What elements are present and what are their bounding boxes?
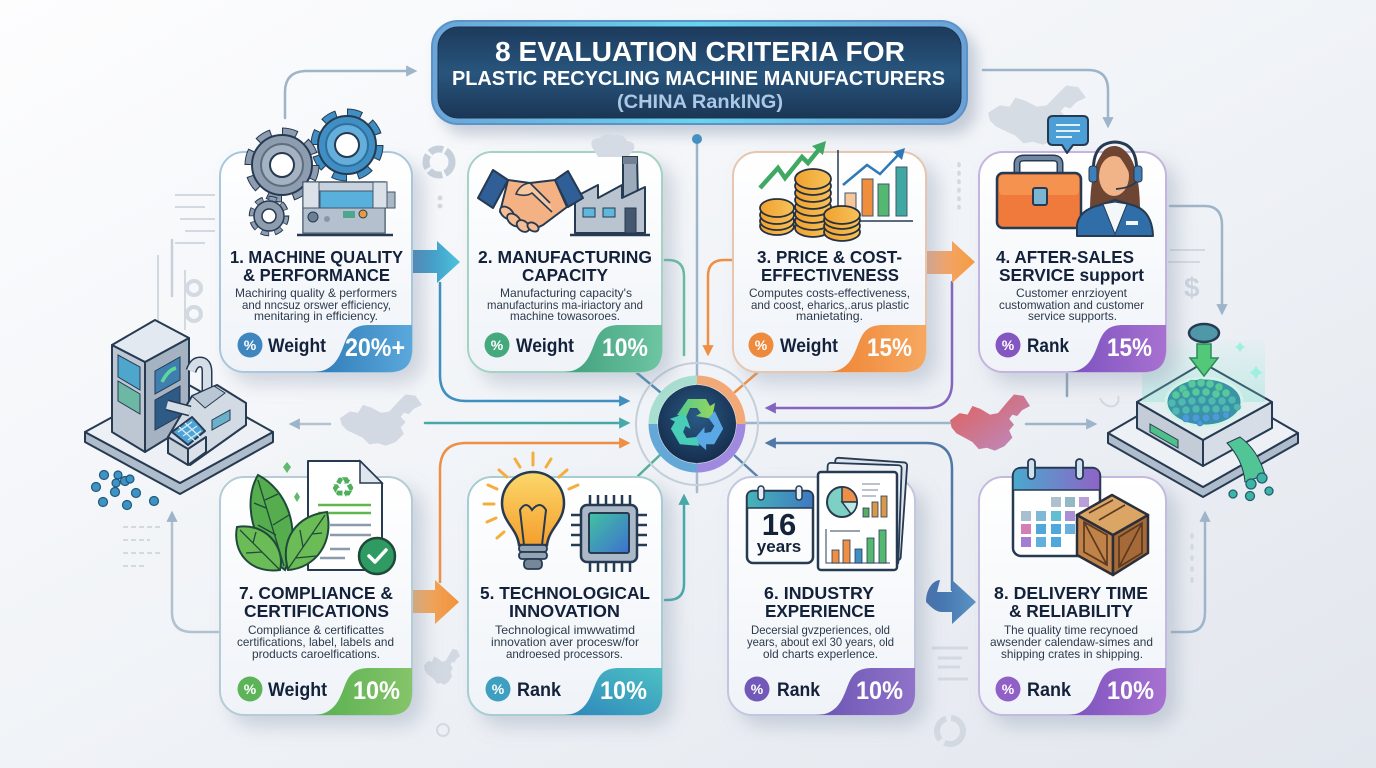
badge: % xyxy=(492,681,505,697)
icon: calendar and reports xyxy=(747,458,907,570)
badge xyxy=(238,676,262,702)
big arrow: card 6 to card 8 xyxy=(926,580,976,624)
description: shipping crates in shipping. xyxy=(1001,647,1143,661)
card xyxy=(468,152,662,372)
illustration: right pelletizing machine xyxy=(1108,324,1298,500)
value tab xyxy=(1067,325,1166,372)
connector: card 2 to hub xyxy=(665,260,684,355)
panel: criterion 5 xyxy=(468,453,662,715)
arrow: card 5 to hub xyxy=(665,497,684,600)
description xyxy=(491,623,639,661)
heading: 4. AFTER-SALES xyxy=(996,247,1134,267)
badge: % xyxy=(1002,337,1015,353)
description: old charts experlence. xyxy=(763,647,878,661)
arrow: map to hub xyxy=(425,422,627,424)
description: Technological imwwatimd xyxy=(495,623,635,637)
value: 10% xyxy=(1107,677,1154,705)
heading: EFFECTIVENESS xyxy=(761,265,899,285)
description: customwation and customer xyxy=(999,298,1144,312)
description: Customer enrzioyent xyxy=(1016,286,1128,300)
panel: criterion 2 xyxy=(468,134,662,372)
description xyxy=(999,286,1144,323)
description: The quality time recynoed xyxy=(1004,623,1138,637)
value: 10% xyxy=(600,677,647,705)
description xyxy=(749,286,910,323)
icon: briefcase and support agent xyxy=(997,116,1153,236)
big arrow: card 7 to card 5 xyxy=(412,580,459,624)
description: Machiring quality & performers xyxy=(235,286,397,300)
illustration: left recycling machine xyxy=(85,320,273,494)
card xyxy=(733,152,926,372)
arrow: left machine outlet xyxy=(172,514,218,632)
heading: & RELIABILITY xyxy=(1009,601,1133,621)
value: 10% xyxy=(856,677,903,705)
icon: calendar and crate xyxy=(1013,459,1148,575)
description: products caroelfications. xyxy=(252,647,380,661)
arrow: right machine outlet xyxy=(1172,514,1205,632)
label: Weight xyxy=(268,336,327,357)
icon: gears and machine xyxy=(249,113,395,235)
icon: calendar and reports: years xyxy=(757,537,801,556)
badge xyxy=(996,332,1020,358)
description: and nncsuz orswer efficiency, xyxy=(242,298,391,312)
line: title to hub xyxy=(696,140,698,390)
arrow: card 4 to hub xyxy=(768,282,952,408)
panel: criterion 1 xyxy=(220,113,412,372)
heading xyxy=(764,583,875,621)
heading: 6. INDUSTRY xyxy=(764,583,874,603)
value tab xyxy=(827,325,926,372)
badge xyxy=(748,332,774,358)
background: decorative lines and dollar sign xyxy=(123,149,1205,744)
heading: CERTIFICATIONS xyxy=(244,601,389,621)
icon: handshake and factory xyxy=(478,134,650,235)
description xyxy=(237,623,394,661)
icon: calendar and reports: 16 xyxy=(762,507,796,542)
diagonal spokes xyxy=(637,373,660,392)
label: Weight xyxy=(268,680,328,701)
value tab xyxy=(563,325,662,372)
icon: coins and growth chart xyxy=(760,141,913,241)
panel: criterion 3 xyxy=(733,141,926,372)
card xyxy=(979,477,1166,715)
central recycling hub xyxy=(636,363,758,485)
badge: % xyxy=(491,337,504,353)
heading: 5. TECHNOLOGICAL xyxy=(480,583,650,603)
heading: 8. DELIVERY TIME xyxy=(994,583,1148,603)
big arrow: card 3 to card 4 xyxy=(926,241,975,283)
heading: 3. PRICE & COST- xyxy=(757,247,902,267)
description: machine towasoroes. xyxy=(510,309,620,323)
background: decorative lines and dollar sign: $ xyxy=(1184,272,1200,303)
heading: 2. MANUFACTURING xyxy=(478,247,652,267)
badge: % xyxy=(751,681,764,697)
title dot xyxy=(692,134,702,144)
heading xyxy=(757,247,902,285)
description: service supports. xyxy=(1028,309,1117,323)
arrow: title right feed xyxy=(983,70,1108,125)
heading: 1. MACHINE QUALITY xyxy=(230,247,403,267)
description xyxy=(990,623,1153,661)
value tab xyxy=(816,668,915,715)
description: years, about exl 30 years, old xyxy=(747,635,894,649)
arrow: card 8 to hub xyxy=(768,443,952,590)
title banner: 8 EVALUATION CRITERIA FOR xyxy=(495,36,905,67)
title banner: PLASTIC RECYCLING MACHINE MANUFACTURERS xyxy=(452,67,945,90)
heading xyxy=(230,247,403,285)
left machine pellets xyxy=(92,470,158,510)
icon: light bulb and chip xyxy=(484,453,647,572)
badge xyxy=(744,676,770,702)
heading: CAPACITY xyxy=(522,265,608,285)
arrow: card 1 to hub xyxy=(440,283,627,401)
value tab xyxy=(1067,668,1166,715)
value tab xyxy=(313,668,412,715)
heading xyxy=(996,247,1144,285)
line: card 4 down xyxy=(1066,374,1068,396)
badge: % xyxy=(1002,681,1015,697)
label: Weight xyxy=(780,336,839,357)
panel: criterion 6 xyxy=(728,458,915,715)
arrow: card 4 to right machine xyxy=(1170,206,1222,312)
panel: criterion 7 xyxy=(220,461,412,715)
badge: % xyxy=(755,337,768,353)
value: 20%+ xyxy=(345,334,405,362)
description: Manufacturing capacity's xyxy=(500,286,632,300)
connector arrows xyxy=(172,70,1222,632)
label: Rank xyxy=(517,680,561,701)
description: androesed processors. xyxy=(506,647,623,661)
big arrow: card 1 to card 2 xyxy=(412,241,460,283)
description: manufacturins ma-iriactory and xyxy=(487,298,643,312)
card xyxy=(979,152,1166,372)
label: Weight xyxy=(516,336,575,357)
title banner: (CHINA RankING) xyxy=(617,92,783,113)
badge xyxy=(486,676,510,702)
line: hub to right map xyxy=(735,422,950,424)
badge xyxy=(484,332,510,358)
background: China map silhouettes xyxy=(340,86,1086,685)
heading xyxy=(994,583,1148,621)
arrow: card 7 to hub xyxy=(440,443,627,582)
heading xyxy=(239,583,393,621)
description xyxy=(235,286,397,323)
icon: leaves and certificate xyxy=(236,461,395,574)
heading: EXPERIENCE xyxy=(765,601,875,621)
badge: % xyxy=(244,681,257,697)
arrow: left machine up to card 1 xyxy=(171,240,173,296)
line: hub downward xyxy=(696,460,698,492)
value: 15% xyxy=(1107,334,1152,362)
description: Computes costs-effectiveness, xyxy=(749,286,910,300)
description: innovation aver procesw/for xyxy=(491,635,639,649)
badge xyxy=(996,676,1020,702)
heading: 7. COMPLIANCE & xyxy=(239,583,393,603)
arrow: title left feed xyxy=(285,71,414,118)
value: 15% xyxy=(867,334,912,362)
label: Rank xyxy=(777,680,820,701)
description xyxy=(487,286,643,323)
badge: % xyxy=(244,337,257,353)
heading: & PERFORMANCE xyxy=(243,265,390,285)
badge xyxy=(238,332,262,358)
heading: INNOVATION xyxy=(509,601,620,621)
heading xyxy=(478,247,652,285)
label: Rank xyxy=(1027,680,1071,701)
arrow: card 3 to hub xyxy=(708,260,732,353)
value: 10% xyxy=(602,334,648,362)
label: Rank xyxy=(1027,336,1069,357)
card xyxy=(220,477,412,715)
heading: SERVICE support xyxy=(999,265,1144,285)
description: Compliance & certificattes xyxy=(248,623,384,637)
value tab xyxy=(563,668,662,715)
value: 10% xyxy=(353,677,400,705)
description: awsender calendaw-simes and xyxy=(990,635,1153,649)
description: manietating. xyxy=(796,309,863,323)
description: certifications, label, labels and xyxy=(237,635,394,649)
card xyxy=(220,152,412,372)
description: and coost, eharics,.arus plastic xyxy=(751,298,909,312)
panel: criterion 8 xyxy=(979,459,1166,715)
heading xyxy=(480,583,650,621)
description: Decersial gvzperiences, old xyxy=(751,623,890,637)
panel: criterion 4 xyxy=(979,116,1166,372)
description: menitaring in efficiency. xyxy=(254,309,378,323)
card xyxy=(468,477,662,715)
card xyxy=(728,477,915,715)
icon: leaves and certificate: ♻ xyxy=(330,471,356,504)
title banner xyxy=(432,21,967,124)
arrow: right map to machine xyxy=(1026,423,1094,425)
description xyxy=(747,623,894,661)
arrow: left map to machine xyxy=(292,423,330,425)
value tab xyxy=(313,325,412,372)
